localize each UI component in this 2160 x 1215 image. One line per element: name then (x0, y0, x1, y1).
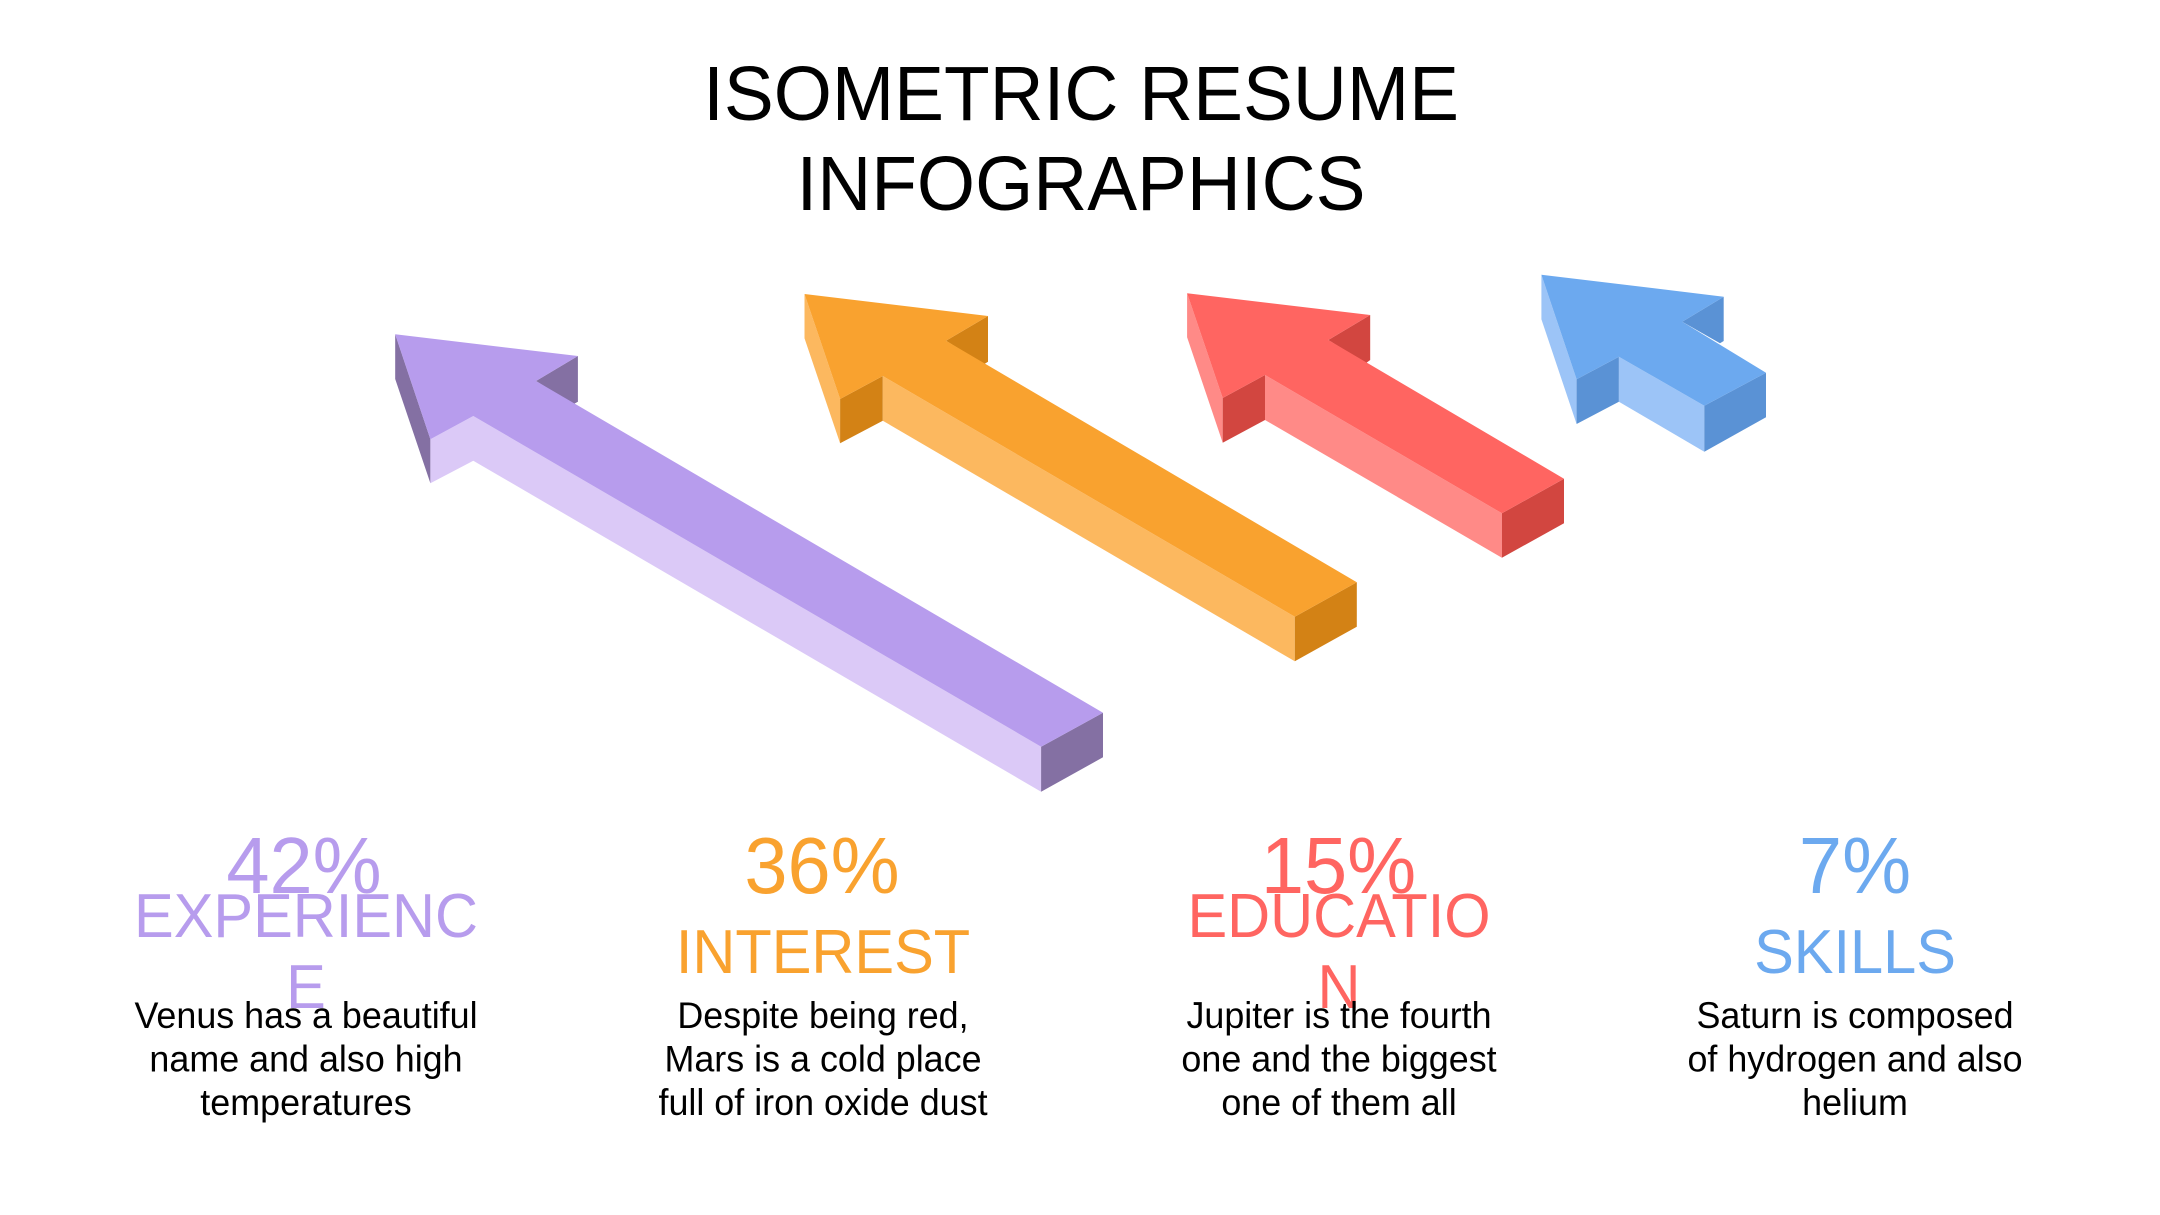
arrow: skills (blue) (1541, 275, 1766, 452)
title: ISOMETRIC RESUME (703, 51, 1459, 137)
percentage: 15%: 15% (1261, 821, 1416, 910)
heading: education (1187, 881, 1491, 1021)
description: education: one of them all (1221, 1082, 1457, 1123)
description: education: one and the biggest (1181, 1038, 1497, 1080)
arrow: interest (orange) (804, 294, 1357, 661)
description: skills: of hydrogen and also (1687, 1038, 2023, 1080)
description: skills: Saturn is composed (1696, 995, 2014, 1036)
percentage: 42%: 42% (226, 821, 382, 910)
heading: skills: SKILLS (1754, 917, 1956, 986)
description: interest: Despite being red, (677, 995, 969, 1036)
percentage: 36%: 36% (744, 821, 900, 910)
heading: experience: E (286, 952, 326, 1021)
description: experience (134, 995, 478, 1123)
column: skills (1687, 821, 2023, 1123)
heading: interest: INTEREST (676, 917, 970, 986)
description: experience: name and also high (149, 1038, 463, 1080)
description: skills (1687, 995, 2023, 1123)
description: experience: Venus has a beautiful (134, 995, 478, 1036)
description: interest: full of iron oxide dust (658, 1082, 988, 1123)
title: INFOGRAPHICS (797, 141, 1365, 227)
description: interest: Mars is a cold place (664, 1038, 982, 1080)
description: experience: temperatures (200, 1082, 412, 1123)
column: experience (134, 821, 478, 1123)
description: skills: helium (1802, 1082, 1908, 1123)
percentage: 7%: 7% (1799, 821, 1911, 910)
description: education: Jupiter is the fourth (1186, 995, 1492, 1036)
description: education (1181, 995, 1497, 1123)
heading: education: EDUCATIO (1187, 881, 1491, 950)
heading: experience (134, 881, 478, 1021)
heading: experience: EXPERIENC (134, 881, 478, 950)
column: interest (658, 821, 988, 1123)
heading: education: N (1318, 952, 1360, 1021)
arrow: experience (purple) (395, 334, 1103, 792)
column: education (1181, 821, 1497, 1123)
description: interest (658, 995, 988, 1123)
title (703, 51, 1459, 227)
arrow: education (red) (1187, 293, 1564, 558)
